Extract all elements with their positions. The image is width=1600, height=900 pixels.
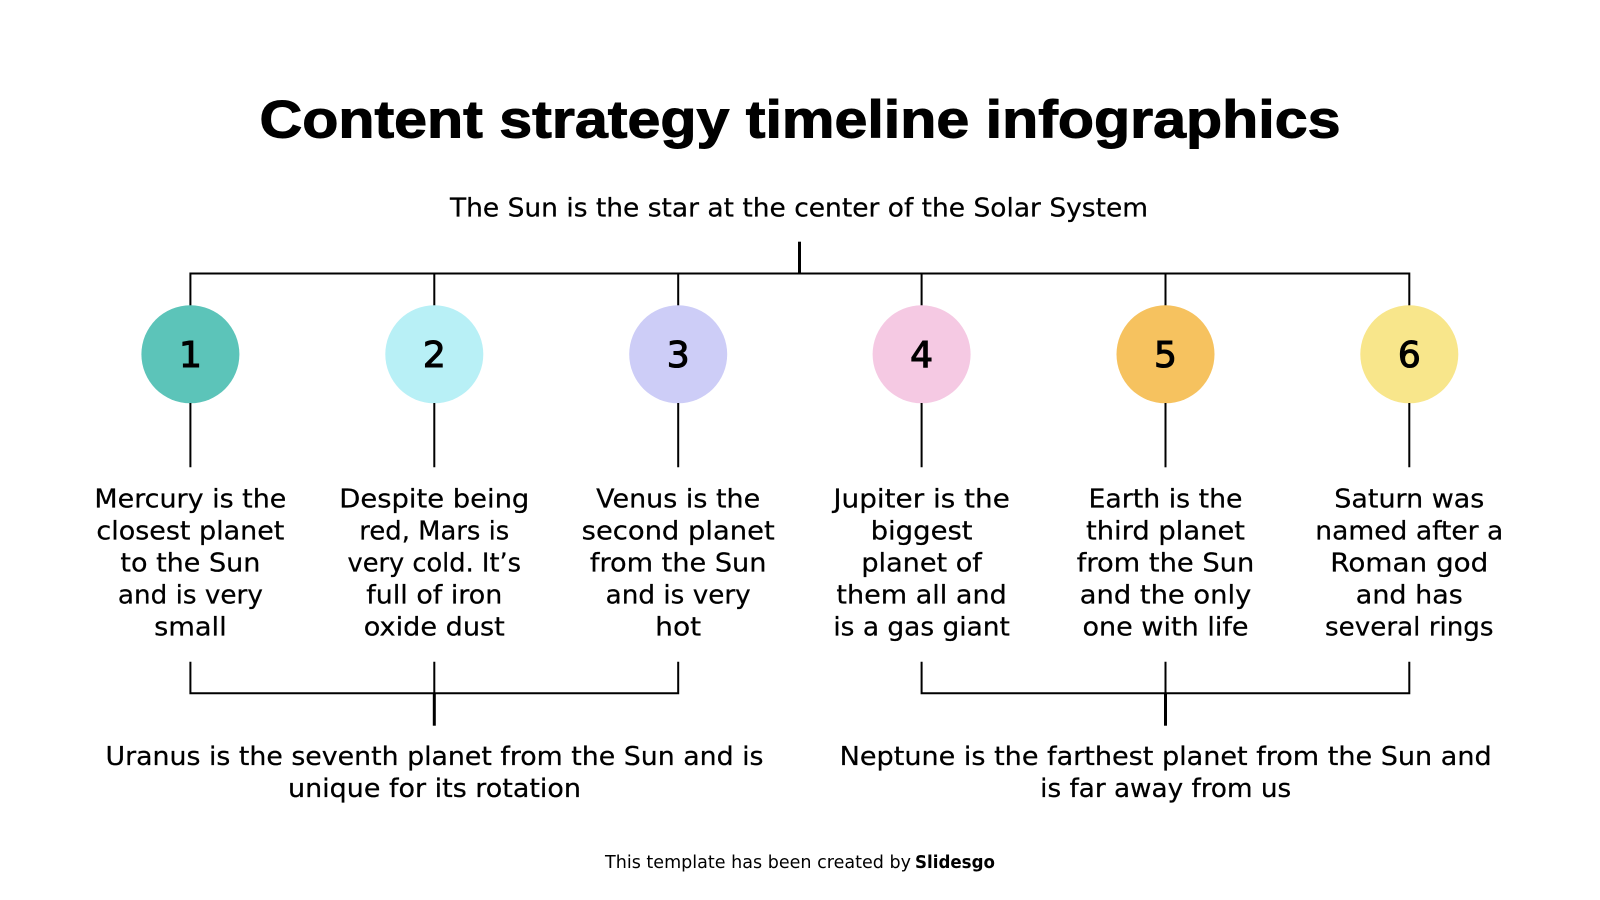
description 2 [339,484,529,642]
right summary text [840,742,1492,804]
circle 4 [873,305,971,403]
circle 6 [1360,305,1458,403]
left summary text: Uranus is the seventh planet from the Sun and is [106,742,764,772]
description 4: planet of [861,548,983,578]
circle 6: 6 [1398,335,1421,376]
description 4: is a gas giant [833,612,1010,642]
description 5: from the Sun [1077,548,1254,578]
left bracket [190,662,678,726]
description 5 [1077,484,1254,642]
description 3: hot [655,612,701,642]
description 1: Mercury is the [94,484,286,514]
description 6: several rings [1325,612,1494,642]
description 5: Earth is the [1088,484,1242,514]
description 6: and has [1356,580,1463,610]
step 5 [1077,305,1254,642]
description 3: and is very [606,580,751,610]
description 1: small [154,612,227,642]
step 1 [94,305,286,642]
description 4: biggest [871,516,973,546]
circle 3 [629,305,727,403]
description 4 [831,484,1010,642]
right summary text: is far away from us [1040,774,1291,804]
description 3: from the Sun [590,548,766,578]
description 4: Jupiter is the [831,484,1010,514]
step 6 [1315,305,1503,642]
description 6: Saturn was [1334,484,1484,514]
right bracket [922,662,1409,726]
footer credit: Slidesgo [915,853,995,873]
description 3 [582,484,775,642]
circle 4: 4 [910,335,933,376]
description 3: second planet [582,516,775,546]
step 3 [582,305,775,642]
circle 5 [1116,305,1214,403]
description 2: oxide dust [364,612,505,642]
description 3: Venus is the [596,484,760,514]
description 5: one with life [1082,612,1248,642]
step 4 [831,305,1010,642]
description 5: and the only [1080,580,1251,610]
description 2: red, Mars is [359,516,509,546]
left summary text: unique for its rotation [288,774,581,804]
step 2 [339,305,529,642]
description 6: named after a [1315,516,1503,546]
description 5: third planet [1086,516,1245,546]
description 6 [1315,484,1503,642]
title: Content strategy timeline infographics [260,90,1340,150]
description 1 [94,484,286,642]
description 6: Roman god [1330,548,1488,578]
description 1: closest planet [96,516,284,546]
circle 3: 3 [667,335,690,376]
top connector tree [190,242,1409,306]
left summary text [106,742,764,804]
circle 1 [141,305,239,403]
description 2: very cold. It’s [348,548,521,578]
circle 2 [385,305,483,403]
right summary text: Neptune is the farthest planet from the Sun and [840,742,1492,772]
description 2: Despite being [339,484,529,514]
footer credit: This template has been created by [604,853,911,873]
circle 5: 5 [1154,335,1177,376]
description 4: them all and [836,580,1007,610]
intro text: The Sun is the star at the center of the Solar System [449,194,1148,224]
circle 1: 1 [179,335,202,376]
circle 2: 2 [423,335,446,376]
description 1: to the Sun [120,548,260,578]
description 1: and is very [118,580,263,610]
description 2: full of iron [366,580,502,610]
